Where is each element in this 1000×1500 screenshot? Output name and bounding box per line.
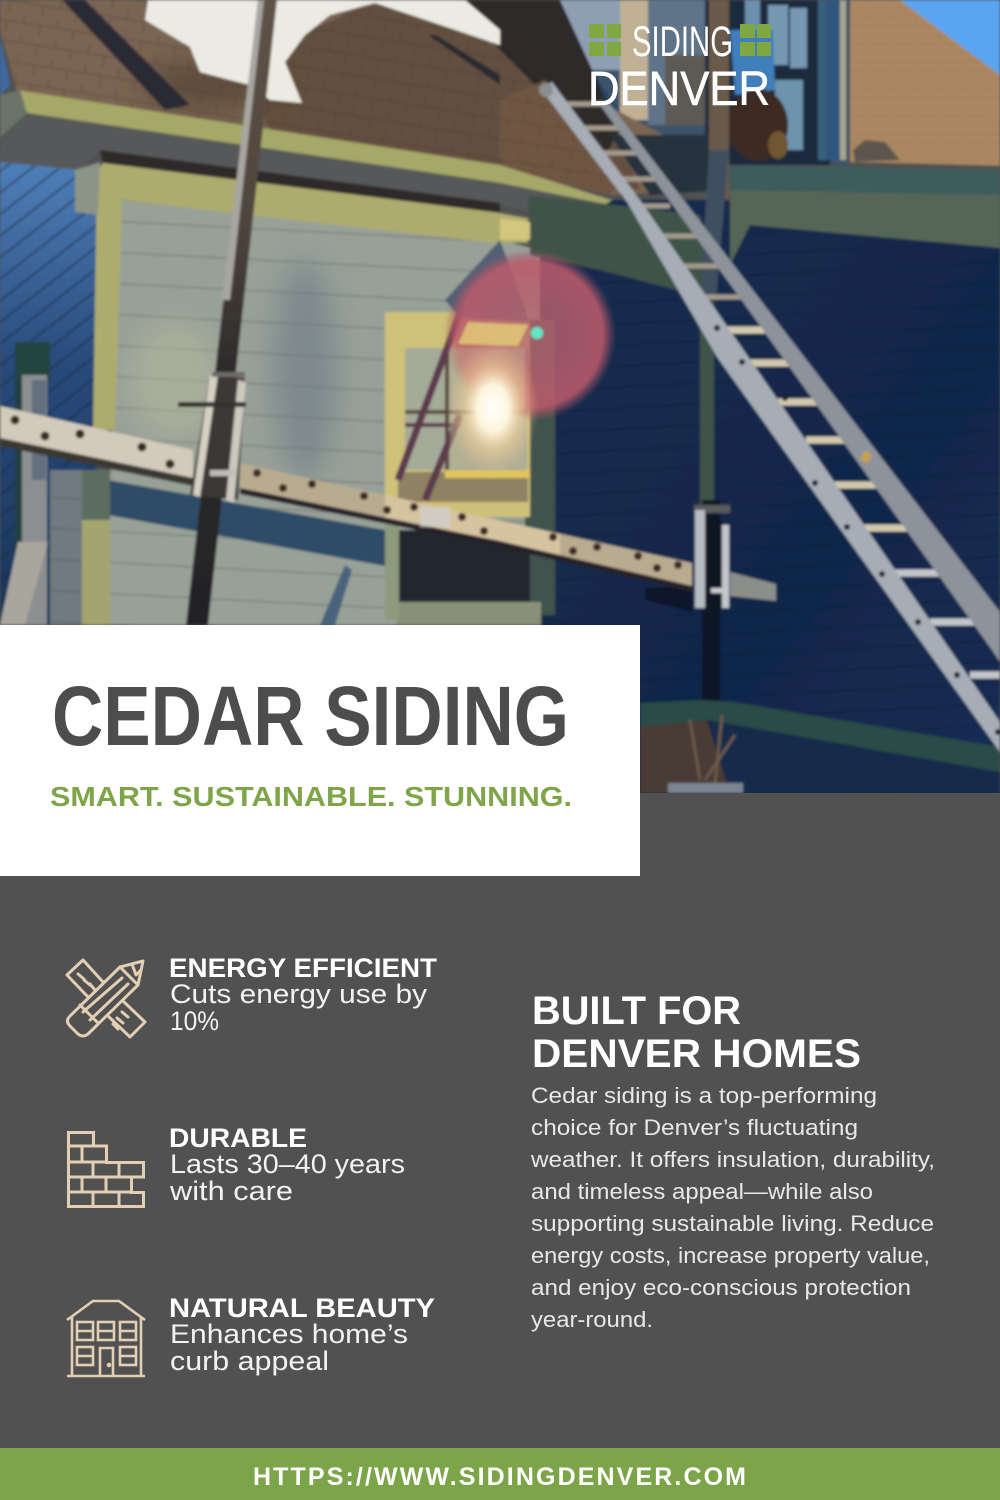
body paragraph: energy costs, increase property value, (531, 1243, 930, 1268)
description: natural beauty: curb appeal (170, 1346, 329, 1376)
green base trim (640, 700, 1000, 772)
horizontal ladder left section (0, 406, 193, 486)
ladder shadow on window (398, 305, 463, 500)
body paragraph: supporting sustainable living. Reduce (531, 1211, 934, 1236)
leaning board (0, 542, 48, 625)
logo: Siding Denver (588, 18, 771, 116)
description: durable: with care (169, 1176, 293, 1206)
section heading: built for Denver homes: DENVER HOMES (532, 1032, 861, 1076)
cyan flare dot (531, 327, 543, 339)
sun glare (450, 348, 537, 468)
sunlit gray siding (105, 200, 540, 625)
feature: energy efficient (67, 953, 437, 1037)
vertical post right (700, 0, 729, 790)
heading: durable: DURABLE (169, 1123, 307, 1153)
title panel (0, 625, 640, 876)
body paragraph: and timeless appeal—while also (531, 1179, 873, 1204)
logo word SIDING: SIDING (632, 18, 733, 66)
diagonal ladder (539, 82, 1000, 752)
body paragraph: and enjoy eco-conscious protection (531, 1275, 911, 1300)
website url: HTTPS://WWW.SIDINGDENVER.COM (253, 1463, 746, 1491)
main leaning pole (186, 0, 277, 625)
section heading: built for Denver homes (532, 989, 861, 1076)
description: energy efficient: 10% (170, 1006, 219, 1036)
base stone and planter (640, 715, 1000, 793)
body paragraph: choice for Denver’s fluctuating (531, 1115, 858, 1140)
feature: durable (68, 1123, 405, 1207)
dormer and window (518, 0, 850, 165)
right pole bracket (694, 505, 730, 608)
icon: house (67, 1301, 145, 1376)
left blue wall (0, 35, 97, 625)
right roof (843, 0, 1000, 166)
left pole bracket (178, 372, 246, 503)
description: durable: Lasts 30–40 years (170, 1149, 405, 1179)
body paragraph (530, 1083, 935, 1332)
feature: natural beauty (67, 1293, 435, 1376)
logo word DENVER: DENVER (588, 63, 770, 116)
dark soffit and gable above blue wall (500, 165, 1000, 300)
description: natural beauty: Enhances home’s (170, 1319, 408, 1349)
window with trim (385, 312, 555, 625)
sunlit window top (445, 322, 530, 478)
description: durable (169, 1149, 405, 1206)
title: CEDAR SIDING (52, 669, 569, 763)
sky (895, 0, 1000, 80)
soffit shadow (0, 114, 600, 213)
description: natural beauty (170, 1319, 408, 1376)
description: energy efficient (170, 979, 428, 1036)
body paragraph: Cedar siding is a top-performing (531, 1083, 877, 1108)
body paragraph: year-round. (531, 1307, 653, 1332)
photo: house with ladders (0, 0, 1000, 800)
red lens flare (444, 249, 616, 421)
heading: natural beauty: NATURAL BEAUTY (169, 1293, 435, 1323)
horizontal ladder right section (240, 463, 776, 625)
footer bar (0, 1448, 1000, 1500)
logo squares right (740, 24, 771, 56)
section heading: built for Denver homes: BUILT FOR (532, 989, 741, 1033)
main roof with snow (0, 0, 720, 195)
left door and trim (15, 342, 85, 625)
logo squares left (589, 24, 621, 56)
siding trim frame (75, 162, 528, 625)
roof fascia (17, 90, 612, 208)
icon: brick wall (68, 1132, 144, 1207)
heading: energy efficient: ENERGY EFFICIENT (169, 953, 437, 983)
body paragraph: weather. It offers insulation, durability, (530, 1147, 935, 1172)
right wall in navy siding (530, 200, 1000, 800)
icon: pencil and ruler (67, 960, 145, 1037)
description: energy efficient: Cuts energy use by (170, 979, 428, 1009)
blue shadow on siding beside flare (445, 240, 530, 322)
subtitle: SMART. SUSTAINABLE. STUNNING. (50, 781, 572, 812)
